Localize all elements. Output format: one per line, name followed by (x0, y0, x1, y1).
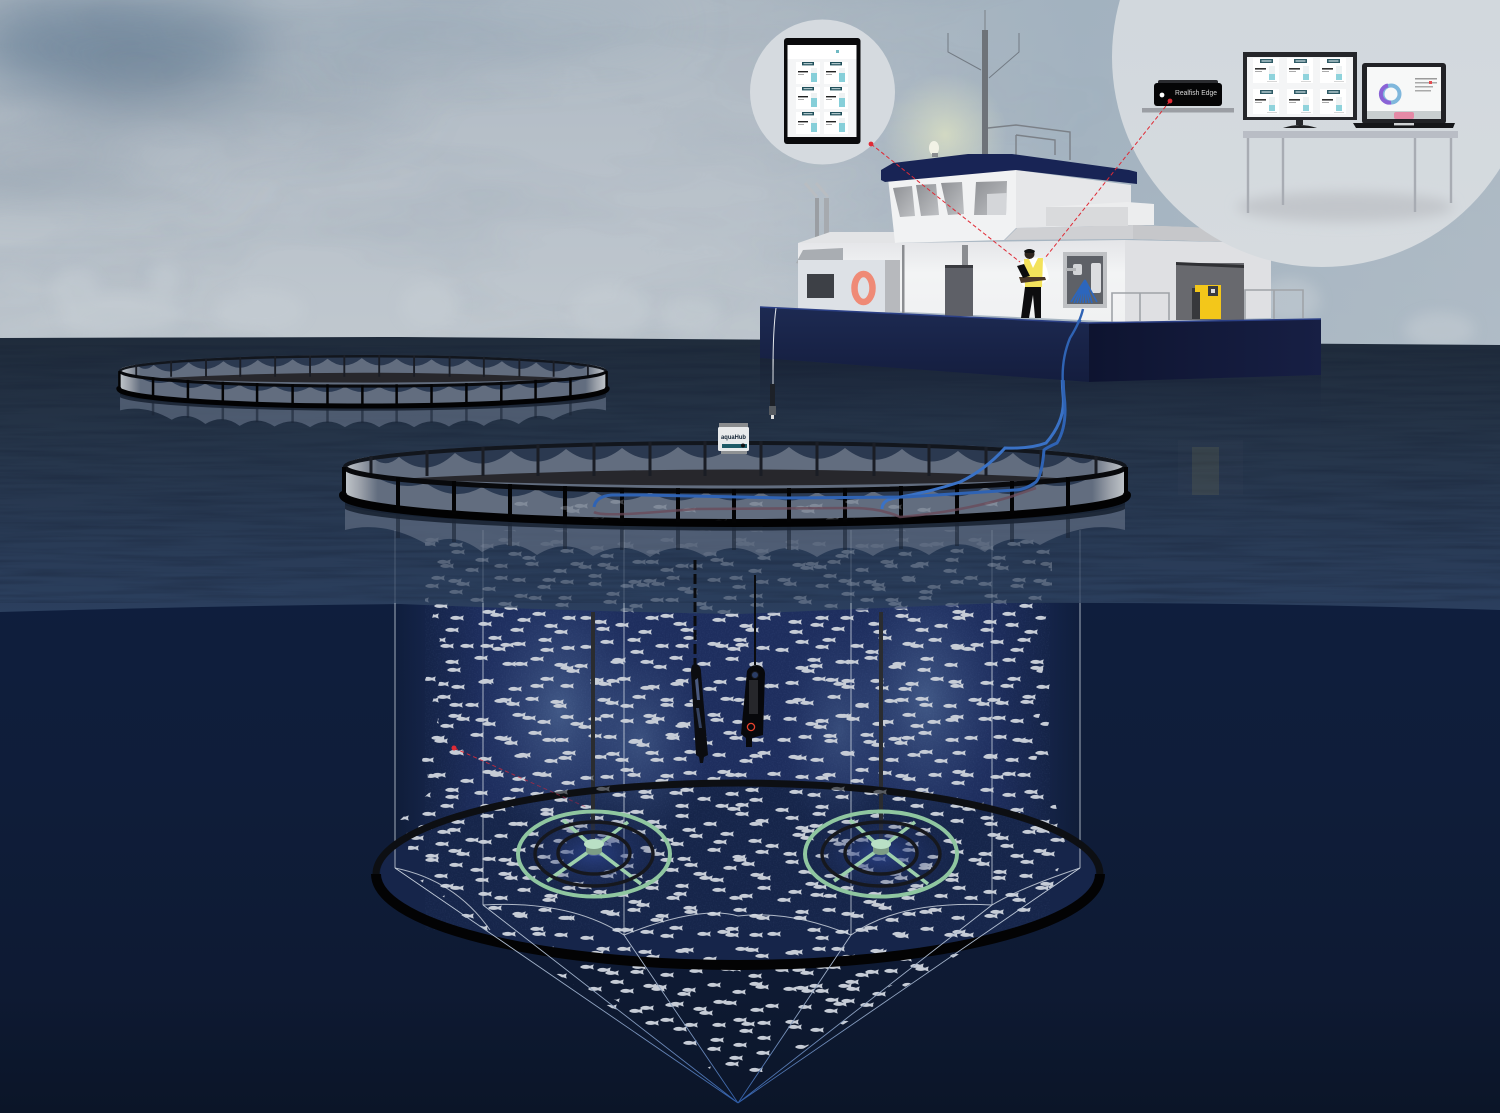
vent (796, 248, 843, 264)
deck railings (1112, 290, 1303, 322)
cage light beams (425, 570, 1050, 930)
left underwater sensor (691, 664, 708, 763)
small fish pen in background (119, 355, 607, 427)
wheelhouse (888, 170, 1154, 243)
desk shadow (1237, 192, 1453, 222)
wheelhouse windows (893, 181, 1007, 217)
cage net vertical lines (395, 530, 1080, 935)
fish overlapping the ring (427, 770, 1038, 794)
tablet device (784, 38, 860, 144)
red dashed links from worker to tablet and edge device (869, 99, 1172, 262)
Realfish Edge device on shelf: Realfish Edge (1175, 90, 1217, 97)
left light rig with ring (518, 812, 670, 896)
net cone to the apex (395, 868, 1080, 1103)
navy roof (881, 154, 1137, 184)
large cage ring (376, 783, 1100, 965)
aquaHub unit on the pen (718, 423, 749, 454)
right light rig with ring (805, 812, 957, 896)
net bottom scallops (395, 868, 1080, 935)
monitor (1243, 52, 1357, 128)
lower cabin (798, 225, 1271, 322)
desk (1243, 131, 1458, 213)
door and pillars (902, 245, 973, 316)
hose over hull (1063, 309, 1083, 385)
control cabinet with blue cables (1063, 252, 1107, 308)
laptop (1353, 63, 1455, 128)
boat (760, 10, 1321, 385)
underwater background (0, 600, 1500, 1113)
boat hull reflection (760, 358, 1321, 495)
worker with tablet (1017, 249, 1049, 318)
fish seen inside the main pen (514, 500, 998, 520)
exhaust pipes (805, 183, 829, 248)
yellow power unit and door (1176, 262, 1244, 320)
power and data hoses (594, 309, 1083, 517)
faded fish seen through the surface (420, 530, 1060, 620)
edge and desktop callout circle (1112, 0, 1500, 267)
lamp glow (883, 73, 1007, 197)
sensor cable over hull (773, 308, 776, 370)
school of salmon in the cage (395, 600, 1085, 1075)
right underwater camera sensor (741, 665, 765, 747)
tablet callout circle (750, 20, 895, 164)
sky background (0, 0, 1500, 348)
aquaHub unit on the pen: aquaHub (721, 434, 746, 441)
Realfish Edge device on shelf (1142, 80, 1234, 112)
hull (760, 307, 1321, 382)
side panel with window and life ring (798, 260, 900, 312)
main fish pen at surface (343, 441, 1127, 557)
red marker on the cage (452, 746, 588, 808)
sensor ropes (593, 560, 881, 845)
mast and antennas (948, 10, 1070, 160)
sensor cable at boat side (769, 308, 776, 419)
sea surface (0, 337, 1500, 614)
